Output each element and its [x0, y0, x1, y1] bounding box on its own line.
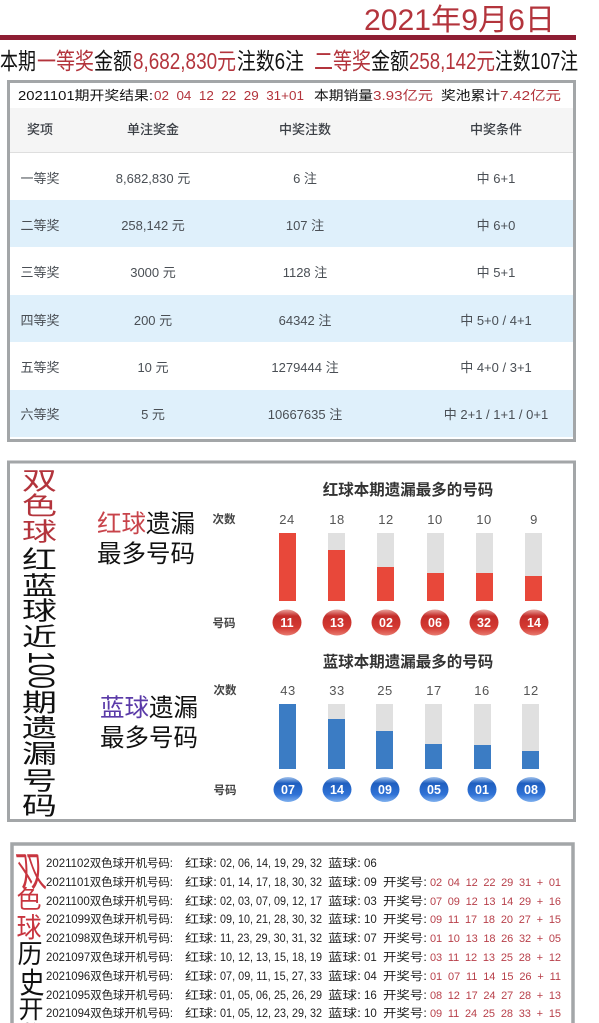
label: blue ball: 最多号码	[100, 724, 198, 752]
row: fifth prize: 五等奖	[20, 360, 60, 375]
history row 2021098	[46, 931, 561, 945]
chart: red ball missing numbers: 红球本期遗漏最多的号码	[323, 480, 493, 499]
bar: red 32	[470, 512, 498, 636]
history row 2021095	[46, 988, 561, 1002]
history row 2021097: 03 11 12 13 25 28 + 12	[430, 952, 561, 964]
row: third prize: 3000 元	[130, 265, 176, 280]
vertical title: 蓝	[22, 572, 57, 600]
bar: blue 08	[516, 683, 546, 802]
chart: red ball missing numbers: 次数	[212, 512, 236, 526]
history row 2021095: 16	[364, 990, 377, 1002]
history row 2021101: 开奖号:	[383, 875, 427, 889]
row: second prize: 中 6+0	[477, 218, 515, 233]
bar: red 14: 9	[530, 512, 538, 527]
history row 2021097: 2021097双色球开机号码:	[46, 950, 173, 964]
draw result line: 02 04 12 22 29 31+01	[154, 88, 304, 103]
dark red header rule	[0, 35, 576, 40]
chart: red ball missing numbers: 号码	[212, 617, 236, 630]
history row 2021097: 10, 12, 13, 15, 18, 19	[220, 952, 322, 964]
history row 2021095: 01, 05, 06, 25, 26, 29	[220, 990, 322, 1002]
vertical title: 近	[22, 623, 57, 651]
bar: red 06	[420, 512, 450, 636]
row: sixth prize: 六等奖	[20, 407, 60, 422]
bar: blue 05	[420, 683, 448, 802]
history row 2021101: 2021101双色球开机号码:	[46, 875, 173, 889]
chart: blue ball missing numbers	[214, 652, 546, 802]
vertical title: 期	[22, 689, 57, 717]
bar: blue 09	[370, 683, 400, 802]
history row 2021097: 红球:	[185, 950, 217, 964]
vertical title: 号	[22, 767, 57, 795]
bar: red 13: 18	[329, 512, 345, 527]
row: fourth prize: 四等奖	[20, 313, 60, 328]
row: fourth prize: 64342 注	[279, 313, 331, 328]
prize summary line: 二等奖	[314, 48, 371, 74]
draw result line: 2021101期开奖结果:	[18, 88, 153, 103]
history row 2021100: 2021100双色球开机号码:	[46, 894, 173, 908]
vertical title: 色	[22, 492, 57, 520]
label: blue ball: 蓝球遗漏	[100, 694, 198, 722]
history row 2021097: 01	[364, 952, 377, 964]
bar: blue 05: 05	[427, 783, 441, 797]
history row 2021099: 红球:	[185, 912, 217, 926]
prize summary line: 一等奖	[37, 48, 94, 74]
bar: red 13	[322, 512, 352, 636]
panel: prize table	[8, 82, 574, 440]
history row 2021098: 11, 23, 29, 30, 31, 32	[220, 933, 322, 945]
label: red ball	[97, 510, 195, 568]
history row 2021094: 10	[364, 1008, 377, 1020]
history row 2021096: 开奖号:	[383, 969, 427, 983]
history row 2021099: 2021099双色球开机号码:	[46, 912, 173, 926]
history row 2021095: 蓝球:	[328, 988, 361, 1002]
history row 2021094: 开奖号:	[383, 1006, 427, 1020]
history row 2021097: 开奖号:	[383, 950, 427, 964]
row: third prize	[20, 265, 515, 280]
history row 2021095: 08 12 17 24 27 28 + 13	[430, 990, 561, 1002]
history row 2021101	[46, 875, 561, 889]
vertical title	[13, 849, 49, 1023]
row: second prize: 107 注	[286, 218, 324, 233]
history row 2021097: 蓝球:	[328, 950, 361, 964]
history row 2021095: 红球:	[185, 988, 217, 1002]
bar: blue 14: 14	[330, 783, 344, 797]
bar: blue 05: 17	[426, 683, 442, 698]
bar: blue 07: 43	[280, 683, 296, 698]
draw result line: 3.93亿元	[373, 88, 433, 103]
history row 2021102: 蓝球:	[328, 856, 361, 870]
vertical title: 球	[17, 912, 41, 943]
bar: red 11	[272, 512, 302, 636]
history row 2021094: 红球:	[185, 1006, 217, 1020]
row: third prize: 三等奖	[20, 265, 60, 280]
table header: 中奖注数	[279, 122, 331, 137]
history row 2021101: 红球:	[185, 875, 217, 889]
history row 2021099: 开奖号:	[383, 912, 427, 926]
chart: blue ball missing numbers: 号码	[214, 784, 236, 797]
vertical title: 100	[21, 651, 60, 689]
row: fourth prize: 200 元	[134, 313, 172, 328]
history row 2021096: 04	[364, 971, 377, 983]
bar: red 06: 06	[428, 616, 442, 630]
table header: 中奖条件	[470, 122, 522, 137]
history row 2021100: 红球:	[185, 894, 217, 908]
bar: blue 09: 09	[378, 783, 392, 797]
history row 2021101: 09	[364, 877, 377, 889]
row: fifth prize: 1279444 注	[271, 360, 339, 375]
row: fifth prize: 中 4+0 / 3+1	[460, 360, 532, 375]
bar: blue 09: 25	[377, 683, 393, 698]
history row 2021098: 蓝球:	[328, 931, 361, 945]
label: red ball: 红球遗漏	[97, 510, 195, 538]
history row 2021096: 2021096双色球开机号码:	[46, 969, 173, 983]
history row 2021096: 红球:	[185, 969, 217, 983]
draw result line	[18, 88, 561, 103]
table header: 单注奖金	[127, 122, 179, 137]
bar: red 13: 13	[330, 616, 344, 630]
bar: red 14	[520, 512, 548, 636]
history row 2021099: 09 11 17 18 20 27 + 15	[430, 914, 561, 926]
vertical title: 球	[22, 518, 57, 546]
history row 2021094	[46, 1006, 561, 1020]
history row 2021098: 红球:	[185, 931, 217, 945]
prize summary line: 本期	[0, 48, 36, 74]
row: third prize: 1128 注	[283, 265, 327, 280]
history row 2021101: 01, 14, 17, 18, 30, 32	[220, 877, 322, 889]
bar: red 02: 02	[379, 616, 393, 630]
bar: red 32: 32	[477, 616, 491, 630]
bar: blue 14	[322, 683, 352, 802]
history row 2021099: 10	[364, 914, 377, 926]
vertical title: 遗	[22, 714, 57, 742]
row: fifth prize	[20, 360, 532, 375]
history row 2021099	[46, 912, 561, 926]
bar: blue 01	[468, 683, 496, 802]
history row 2021098: 01 10 13 18 26 32 + 05	[430, 933, 561, 945]
history row 2021098: 2021098双色球开机号码:	[46, 931, 173, 945]
panel: draw history	[12, 844, 573, 1023]
history row 2021100: 开奖号:	[383, 894, 427, 908]
history row 2021096: 01 07 11 14 15 26 + 11	[430, 971, 561, 983]
vertical title: 史	[20, 967, 44, 999]
bar: red 32: 10	[476, 512, 492, 527]
prize summary line: 金额	[371, 48, 409, 74]
row: first prize: 中 6+1	[477, 171, 515, 186]
history row 2021096: 蓝球:	[328, 969, 361, 983]
bar: blue 07	[274, 683, 302, 802]
history row 2021094: 01, 05, 12, 23, 29, 32	[220, 1008, 322, 1020]
history row 2021102: 02, 06, 14, 19, 29, 32	[220, 858, 322, 870]
row: third prize: 中 5+1	[477, 265, 515, 280]
prize summary line	[0, 48, 578, 74]
row: sixth prize	[10, 390, 573, 437]
label: blue ball	[100, 694, 198, 752]
draw result line: 奖池累计	[441, 88, 500, 103]
row: second prize	[10, 200, 573, 247]
bar: red 02: 12	[378, 512, 394, 527]
bar: blue 08: 08	[524, 783, 538, 797]
panel: missing numbers	[8, 462, 574, 820]
bar: red 11: 11	[280, 616, 294, 630]
vertical title: 双	[22, 467, 57, 495]
table header: 奖项	[27, 122, 53, 137]
history row 2021098: 07	[364, 933, 377, 945]
history row 2021096: 07, 09, 11, 15, 27, 33	[220, 971, 322, 983]
history row 2021100: 蓝球:	[328, 894, 361, 908]
history row 2021100	[46, 894, 561, 908]
vertical title	[21, 467, 60, 820]
table header	[10, 108, 573, 153]
history row 2021102: 06	[364, 858, 377, 870]
vertical title: 历	[18, 940, 42, 969]
bar: blue 01: 16	[474, 683, 490, 698]
bar: blue 01: 01	[475, 783, 489, 797]
vertical title: 色	[16, 886, 42, 914]
history row 2021099: 蓝球:	[328, 912, 361, 926]
row: first prize: 8,682,830 元	[116, 171, 190, 186]
vertical title: 双	[13, 849, 49, 895]
date title: 2021年9月6日	[364, 4, 555, 37]
prize summary line: 258,142元	[409, 48, 495, 74]
history row 2021095: 开奖号:	[383, 988, 427, 1002]
history row 2021102: 2021102双色球开机号码:	[46, 856, 173, 870]
bar: blue 14: 33	[329, 683, 345, 698]
history row 2021097	[46, 950, 561, 964]
bar: red 11: 24	[279, 512, 295, 527]
bar: blue 07: 07	[281, 783, 295, 797]
history row 2021101: 蓝球:	[328, 875, 361, 889]
row: fifth prize: 10 元	[137, 360, 169, 375]
row: sixth prize: 10667635 注	[268, 407, 342, 422]
bar: red 14: 14	[527, 616, 541, 630]
vertical title: 码	[22, 792, 57, 820]
history row 2021102: 红球:	[185, 856, 217, 870]
vertical title: 漏	[22, 740, 57, 768]
row: first prize: 6 注	[293, 171, 317, 186]
history row 2021100: 07 09 12 13 14 29 + 16	[430, 896, 561, 908]
history row 2021094: 蓝球:	[328, 1006, 361, 1020]
label: red ball: 最多号码	[97, 540, 195, 568]
prize summary line: 注数6注	[237, 48, 304, 74]
bar: red 02	[372, 512, 400, 636]
row: first prize: 一等奖	[20, 171, 60, 186]
history row 2021095: 2021095双色球开机号码:	[46, 988, 173, 1002]
draw result line: 本期销量	[314, 88, 373, 103]
chart: red ball missing numbers	[212, 480, 548, 636]
row: sixth prize: 中 2+1 / 1+1 / 0+1	[444, 407, 548, 422]
history row 2021102	[46, 856, 377, 870]
history row 2021100: 03	[364, 896, 377, 908]
row: sixth prize: 5 元	[141, 407, 165, 422]
history row 2021101: 02 04 12 22 29 31 + 01	[430, 877, 561, 889]
row: fourth prize	[10, 295, 573, 342]
vertical title: 红	[22, 546, 57, 574]
history row 2021099: 09, 10, 21, 28, 30, 32	[220, 914, 322, 926]
row: fourth prize: 中 5+0 / 4+1	[460, 313, 532, 328]
chart: blue ball missing numbers: 次数	[214, 683, 237, 697]
history row 2021096	[46, 969, 561, 983]
history row 2021094: 2021094双色球开机号码:	[46, 1006, 173, 1020]
chart: blue ball missing numbers: 蓝球本期遗漏最多的号码	[323, 652, 493, 671]
vertical title: 球	[22, 597, 57, 625]
prize summary line: 金额	[94, 48, 132, 74]
row: second prize: 二等奖	[20, 218, 60, 233]
bar: blue 08: 12	[523, 683, 539, 698]
draw result line: 7.42亿元	[500, 88, 561, 103]
history row 2021100: 02, 03, 07, 09, 12, 17	[220, 896, 322, 908]
row: second prize: 258,142 元	[121, 218, 185, 233]
row: first prize	[20, 171, 515, 186]
prize summary line: 8,682,830元	[133, 48, 236, 74]
history row 2021094: 09 11 24 25 28 33 + 15	[430, 1008, 561, 1020]
history row 2021098: 开奖号:	[383, 931, 427, 945]
bar: red 06: 10	[427, 512, 443, 527]
